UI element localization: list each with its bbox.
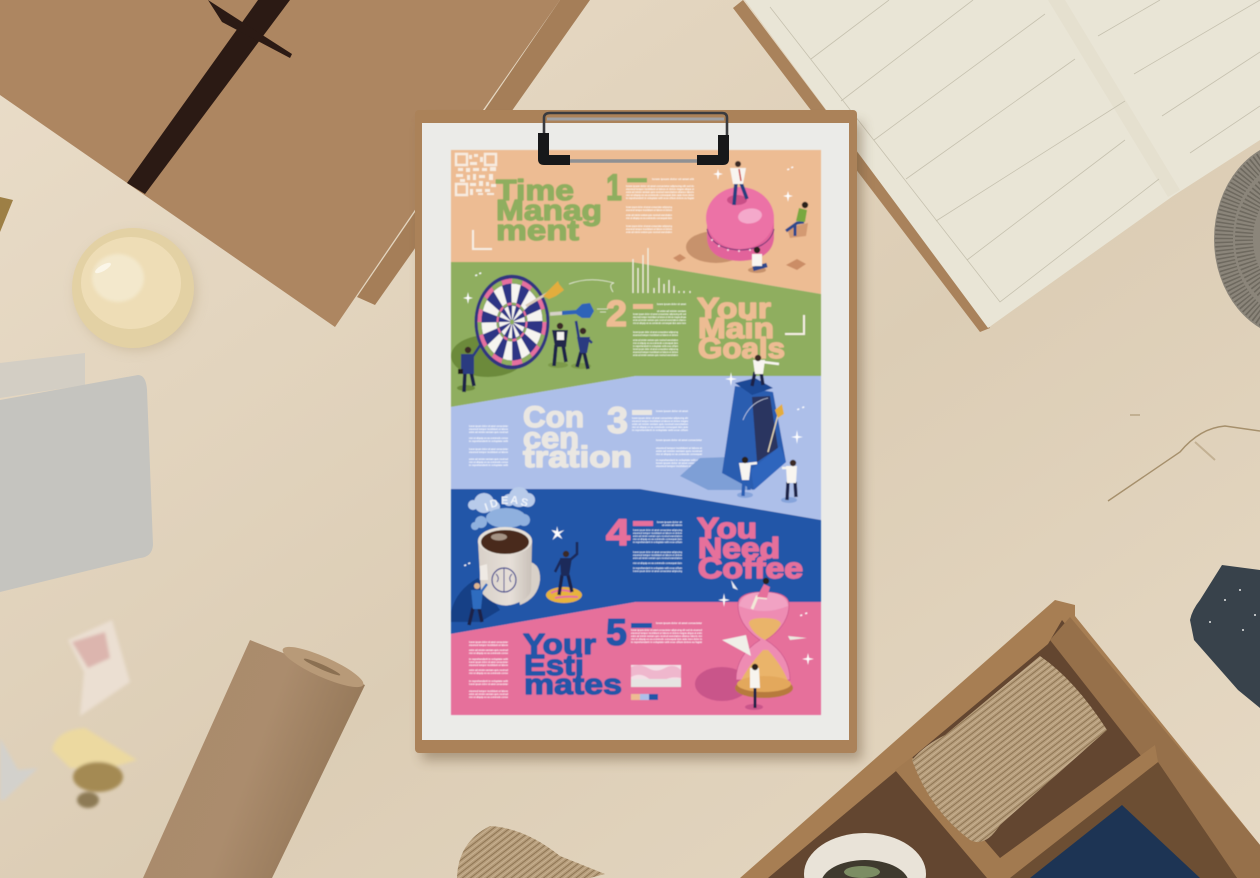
heading: Concentration: Con — [523, 401, 584, 434]
open notebook — [733, 0, 1260, 332]
sparkles — [464, 526, 564, 566]
heading: You Need Coffee — [697, 513, 803, 585]
figure: man sitting with laptop — [748, 247, 767, 273]
right text block 3: lorem ipsum dolor sit amet — [656, 409, 688, 413]
left text block 5: enim ad minim veniam quis nostrud — [469, 692, 508, 696]
text block 4: eiusmod tempor incididunt ut labore et dolore — [633, 531, 682, 535]
heading: You Need Coffee: You — [697, 513, 757, 545]
icon: kitchen timer — [686, 187, 774, 263]
figure: woman on hourglass — [752, 578, 770, 609]
text block 4: nisi ut aliquip ex ea commodo consequat duis — [633, 561, 682, 565]
text block 2: eiusmod tempor incididunt ut labore et dolore — [633, 333, 678, 337]
text block 4: enim ad minim veniam quis nostrud exercitation — [633, 556, 682, 560]
left text block 3 — [469, 424, 508, 467]
icon: hourglass — [695, 592, 793, 701]
number 3: 3 — [607, 400, 628, 441]
area chart — [631, 665, 681, 687]
left text block 5: enim ad minim veniam quis nostrud — [469, 668, 508, 672]
right text block 5: enim ad minim veniam quis nostrud exercitation ullamco laboris nisi — [631, 634, 702, 638]
right text block 3: enim ad minim veniam quis nostrud exercitation — [632, 422, 688, 426]
twine ball at bottom — [457, 826, 605, 878]
band 1: peach — [451, 150, 821, 294]
left text block 5: nisi ut aliquip ex ea commodo conse — [469, 671, 508, 675]
right text block 3: enim ad minim veniam quis nostrud — [656, 449, 702, 453]
text block 4: in reprehenderit in voluptate velit esse cillum — [633, 540, 683, 544]
text block 2 — [633, 302, 687, 357]
heading: You Need Coffee: Coffee — [698, 553, 803, 585]
number 5: 5 — [606, 612, 627, 653]
left text block 3: nisi ut aliquip ex ea commodo conse — [469, 436, 508, 440]
number 3 — [607, 400, 652, 441]
number 5 — [606, 612, 652, 653]
figure: man leaning on metronome — [737, 457, 757, 498]
torn scraps — [0, 620, 137, 808]
text block 1: eiusmod tempor incididunt ut labore et dolore — [626, 208, 672, 212]
illustration: idea clouds: D — [489, 497, 500, 511]
left text block 5: eiusmod tempor incididunt ut labore — [469, 663, 508, 667]
left text block 5 — [469, 640, 508, 699]
icon: dartboard — [474, 275, 550, 369]
figure: woman sitting on box — [786, 202, 808, 238]
left text block 3: enim ad minim veniam quis nostrud — [469, 457, 508, 461]
left text block 5: in reprehenderit in voluptate velit — [469, 679, 508, 683]
icon: metronome — [680, 378, 786, 490]
figure: man with clipboard — [548, 323, 568, 368]
right text block 3: eiusmod tempor incididunt ut labore et dolore magna — [632, 419, 688, 423]
left text block 3: eiusmod tempor incididunt ut labore — [469, 450, 508, 454]
text block 4: lorem ipsum dolor sit amet consectetur adipiscing — [633, 550, 682, 554]
heading: Concentration: tration — [523, 441, 632, 474]
heading: Your Main Goals: Main — [698, 313, 774, 345]
right text block 3: in reprehenderit in voluptate velit esse cillum — [632, 428, 689, 432]
heading: Your Main Goals — [697, 293, 785, 365]
motion lines — [569, 280, 614, 312]
left text block 5: lorem ipsum dolor sit amet consectetur — [469, 640, 508, 644]
text block 2: eiusmod tempor incididunt ut labore et dolore — [633, 350, 678, 354]
left text block 5: in reprehenderit in voluptate velit — [469, 657, 508, 661]
text block 2: lorem ipsum dolor sit amet consectetur adipiscing — [633, 330, 678, 334]
right text block 3: lorem ipsum dolor sit amet consectetur — [656, 438, 702, 442]
icon: yellow dart — [526, 281, 564, 306]
right text block 5: eiusmod tempor incididunt ut labore et dolore magna aliqua ut enim — [631, 631, 702, 635]
wax disc — [72, 228, 196, 350]
text block 4: ut enim ad minim — [662, 523, 683, 527]
text block 2: lorem ipsum dolor sit amet consectetur adipiscing elit sed — [633, 312, 686, 316]
number 1 — [606, 167, 647, 208]
text block 4: eiusmod tempor incididunt ut labore et dolore — [633, 553, 682, 557]
right text block 5: nisi ut aliquip ex ea commodo consequat duis aute irure dolor in — [631, 637, 702, 641]
clipboard board — [415, 110, 857, 753]
right text block 5: lorem ipsum dolor sit amet consectetur adipiscing elit sed do eiusmod — [631, 628, 702, 632]
left text block 5: eiusmod tempor incididunt ut labore — [469, 689, 508, 693]
left text block 5: lorem ipsum dolor sit amet consectetur — [469, 660, 508, 664]
text block 1: lorem ipsum dolor sit amet consectetur adipiscing — [626, 205, 672, 209]
figure: man holding paper by mug — [469, 564, 488, 625]
shadow under board — [451, 335, 525, 377]
QR code — [456, 154, 496, 195]
paper planes — [722, 580, 807, 656]
text block 1: lorem ipsum dolor sit amet consectetur adipiscing — [626, 224, 672, 228]
text block 2: lorem ipsum dolor sit amet — [657, 302, 686, 306]
figure: man on puzzle — [546, 542, 582, 603]
text block 2: enim ad minim veniam quis nostrud exercitation — [633, 353, 678, 357]
text block 1: eiusmod tempor incididunt ut labore et dolore magna aliqua ut — [626, 187, 694, 191]
sparkles — [713, 166, 793, 202]
illustration: idea clouds — [468, 487, 535, 530]
corner bracket — [785, 315, 804, 334]
left text block 5: eiusmod tempor incididunt ut labore — [469, 643, 508, 647]
band 5: pink — [451, 578, 821, 715]
left text block 3: lorem ipsum dolor sit amet consectetur — [469, 447, 508, 451]
left text block 5: nisi ut aliquip ex ea commodo conse — [469, 651, 508, 655]
sparkles — [725, 372, 804, 444]
paper roll — [143, 640, 367, 878]
illustration: idea clouds: S — [519, 496, 529, 510]
heading: Your Estimates: mates — [524, 669, 622, 701]
band 4: dark blue — [451, 487, 821, 634]
number 2: 2 — [606, 293, 627, 334]
illustration: idea clouds: I — [483, 501, 490, 514]
sparkles — [718, 593, 814, 665]
text block 2: enim ad minim veniam quis nostrud exercitation ullamco — [633, 318, 686, 322]
heading: Your Main Goals: Your — [697, 293, 771, 325]
right text block 3: eiusmod tempor incididunt ut labore et — [656, 464, 702, 468]
figure: man at left of board — [457, 344, 481, 392]
right text block 5 — [631, 621, 702, 644]
right text block 3: nisi ut aliquip ex ea commodo consequat — [656, 452, 702, 456]
text block 1: enim ad minim veniam quis nostrud exercitation — [626, 213, 672, 217]
sparkles — [463, 272, 481, 304]
left text block 3: lorem ipsum dolor sit amet consectetur — [469, 424, 508, 428]
small gold piece at left edge — [0, 197, 13, 232]
text block 2: lorem ipsum dolor sit amet consectetur adipiscing — [633, 347, 678, 351]
heading: Time Management: Time — [496, 175, 574, 207]
text block 1: nisi ut aliquip ex ea commodo consequat duis — [626, 216, 672, 220]
left text block 3: eiusmod tempor incididunt ut labore — [469, 427, 508, 431]
left text block 5: enim ad minim veniam quis nostrud — [469, 648, 508, 652]
text block 2: in reprehenderit in voluptate velit esse cillum — [633, 344, 678, 348]
icon: coffee mug — [478, 527, 540, 605]
heading: Your Main Goals: Goals — [698, 333, 785, 365]
right text block 5: lorem ipsum dolor sit amet consectetur — [656, 621, 702, 625]
text block 2: enim ad minim veniam quis nostrud exercitation — [633, 338, 678, 342]
text block 1: enim ad minim veniam quis nostrud exercitation — [626, 230, 672, 234]
right text block 3 — [632, 409, 702, 468]
illustration: idea clouds: E — [501, 495, 508, 507]
right text block 3: in reprehenderit in voluptate velit esse — [656, 458, 702, 462]
left text block 5: nisi ut aliquip ex ea commodo conse — [469, 695, 508, 699]
text block 1: lorem ipsum dolor sit amet consectetur adipiscing elit sed do — [626, 184, 694, 188]
text block 4: lorem ipsum dolor sit amet consectetur adipiscing — [633, 569, 682, 573]
heading: Time Management — [496, 175, 602, 247]
right text block 3: eiusmod tempor incididunt ut labore et — [656, 446, 702, 450]
figure: man reaching up — [571, 321, 592, 369]
text block 1: eiusmod tempor incididunt ut labore et dolore — [626, 227, 672, 231]
figure: man pushing metronome — [781, 460, 797, 503]
text block 2: nisi ut aliquip ex ea commodo consequat duis — [633, 341, 678, 345]
small rocks — [673, 254, 806, 270]
left text block 3: nisi ut aliquip ex ea commodo conse — [469, 460, 508, 464]
illustration: idea clouds: A — [510, 494, 519, 507]
woven stone — [1214, 140, 1260, 338]
number 2 — [606, 293, 653, 334]
clipboard clip — [538, 113, 729, 165]
heading: Your Estimates — [523, 629, 622, 701]
right text block 5: in reprehenderit in voluptate velit esse cillum dolore eu fugiat — [631, 640, 702, 644]
heading: Time Management: ment — [496, 215, 579, 247]
text block 2: ut enim ad minim veniam — [657, 309, 687, 313]
crack line — [1108, 415, 1260, 501]
text block 4: enim ad minim veniam quis nostrud exercitation — [633, 534, 682, 538]
white paper sheet — [422, 123, 849, 740]
right text block 3: lorem ipsum dolor sit amet consectetur — [656, 461, 702, 465]
text block 1: lorem ipsum dolor sit amet elit — [652, 177, 694, 181]
left text block 3: in reprehenderit in voluptate velit — [469, 463, 508, 467]
wooden crate — [740, 600, 1260, 878]
text block 2: eiusmod tempor incididunt ut labore et dolore magna aliqua — [633, 315, 686, 319]
corner bracket — [473, 230, 492, 249]
dark glazed stone — [1190, 565, 1260, 708]
icon: blue dart — [550, 303, 594, 318]
kraft folder with ribbon — [0, 0, 590, 327]
heading: Your Estimates: Esti — [524, 650, 584, 682]
text block 4: in reprehenderit in voluptate velit esse cillum — [633, 566, 683, 570]
heading: Concentration: cen — [523, 422, 579, 455]
text block 1: enim ad minim veniam quis nostrud exercitation ullamco laboris — [626, 190, 694, 194]
text block 1 — [626, 177, 694, 234]
heading: Concentration — [523, 401, 632, 474]
number 4: 4 — [606, 512, 630, 553]
text block 1: in reprehenderit in voluptate velit esse cillum dolore eu fugiat — [626, 196, 694, 200]
left text block 5: lorem ipsum dolor sit amet consectetur — [469, 682, 508, 686]
grey paper card — [0, 353, 153, 592]
text block 4: lorem ipsum dolor sit amet consectetur adipiscing — [633, 528, 682, 532]
figure: man on timer — [730, 161, 747, 205]
left text block 3: in reprehenderit in voluptate velit — [469, 439, 508, 443]
heading: You Need Coffee: Need — [698, 533, 780, 565]
band 2: green — [451, 248, 821, 407]
number 4 — [606, 512, 653, 553]
number 1: 1 — [606, 167, 622, 208]
band 3: light blue — [451, 355, 821, 520]
shadow of mug — [451, 578, 500, 622]
text block 4 — [633, 520, 683, 573]
heading: Your Estimates: Your — [523, 629, 596, 661]
text block 4: lorem ipsum dolor sit — [657, 520, 682, 524]
heading: Time Management: Manag — [496, 195, 602, 227]
left text block 3: enim ad minim veniam quis nostrud — [469, 430, 508, 434]
text block 1: nisi ut aliquip ex ea commodo consequat duis aute irure dolor — [626, 193, 694, 197]
figure: man on metronome — [752, 355, 779, 386]
text block 2: nisi ut aliquip ex ea commodo consequat duis aute irure — [633, 321, 686, 325]
poster — [451, 150, 821, 715]
bar chart — [633, 248, 690, 293]
clipboard shadow — [422, 122, 862, 760]
text block 4: nisi ut aliquip ex ea commodo consequat duis — [633, 537, 682, 541]
right text block 3: nisi ut aliquip ex ea commodo consequat duis aute — [632, 425, 688, 429]
color legend — [631, 694, 658, 700]
figure: woman in hourglass — [745, 664, 763, 710]
right text block 3: lorem ipsum dolor sit amet consectetur adipiscing elit — [632, 416, 688, 420]
